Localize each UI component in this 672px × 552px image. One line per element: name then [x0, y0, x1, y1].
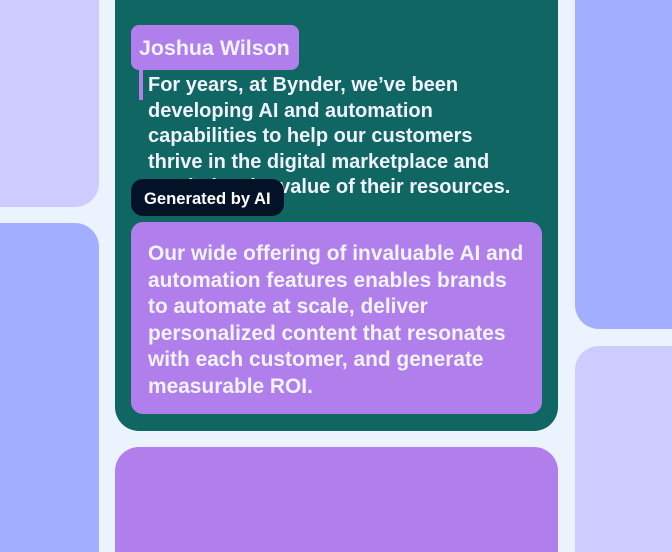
name tag: Joshua Wilson: Joshua Wilson — [139, 36, 290, 60]
panel: top right periwinkle block — [575, 0, 672, 329]
summary text: Our wide offering of invaluable AI and — [148, 242, 523, 265]
quote text — [148, 74, 510, 198]
panel: top left lavender block — [0, 0, 99, 207]
panel: bottom left periwinkle block — [0, 223, 99, 552]
badge: Generated by AI — [131, 179, 284, 216]
panel: bottom purple block — [115, 447, 558, 552]
summary text: personalized content that resonates — [148, 322, 506, 345]
summary text: automation features enables brands — [148, 269, 507, 292]
panel: AI generated summary — [131, 222, 542, 414]
summary text — [148, 242, 523, 398]
name tag: Joshua Wilson — [131, 25, 299, 70]
quote text: thrive in the digital marketplace and — [148, 150, 489, 172]
quote text: For years, at Bynder, we’ve been — [148, 74, 458, 96]
panel: teal message card — [115, 0, 558, 431]
quote text: maximize the value of their resources. — [148, 176, 510, 198]
summary text: measurable ROI. — [148, 375, 313, 398]
badge: Generated by AI: Generated by AI — [144, 188, 271, 208]
summary text: with each customer, and generate — [148, 348, 484, 371]
panel: bottom right lavender block — [575, 346, 672, 552]
quote text: developing AI and automation — [148, 100, 433, 122]
summary text: to automate at scale, deliver — [148, 295, 428, 318]
cursor bar — [139, 68, 143, 100]
quote text: capabilities to help our customers — [148, 125, 473, 147]
